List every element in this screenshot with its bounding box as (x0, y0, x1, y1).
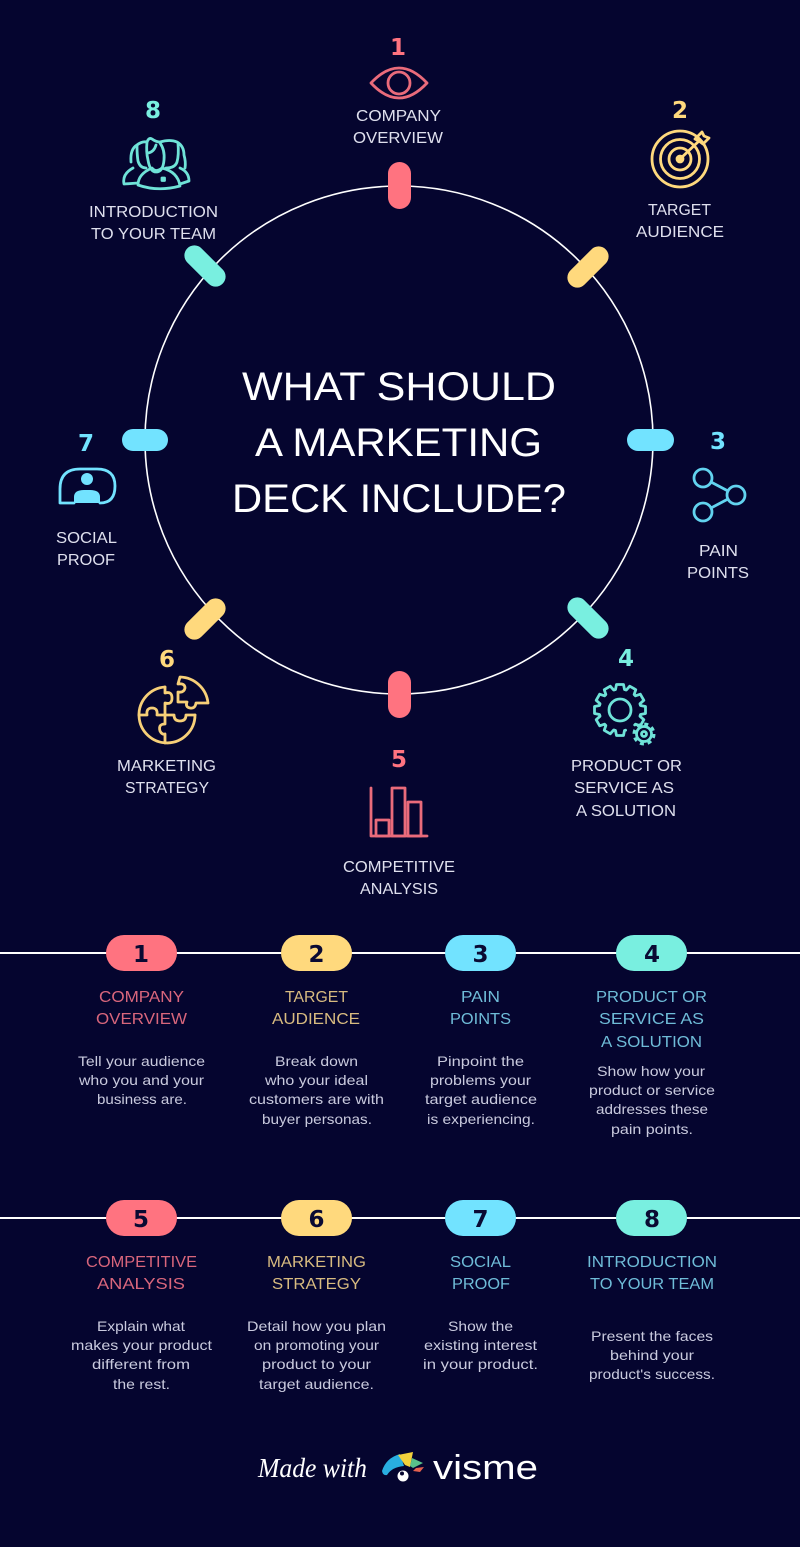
card 6: marketing strategy: MARKETING (267, 1254, 366, 1271)
card 8: introduction to your team (587, 1254, 717, 1382)
card 1: company overview: OVERVIEW (96, 1011, 188, 1028)
item 6: marketing strategy: MARKETING (117, 758, 216, 775)
item 1: company overview: OVERVIEW (353, 130, 444, 147)
card 5: competitive analysis: different from (92, 1356, 190, 1372)
card 7: social proof: Show the (448, 1318, 513, 1334)
title: A MARKETING (255, 421, 542, 465)
item 1: company overview: 1 (390, 35, 406, 61)
card 6: marketing strategy: STRATEGY (272, 1276, 361, 1293)
item 1: company overview: COMPANY (356, 108, 441, 125)
item 4: product or service: A SOLUTION (576, 803, 676, 820)
timeline row 1: 2 (308, 942, 325, 968)
item 3: pain points (687, 429, 749, 582)
card 5: competitive analysis: ANALYSIS (97, 1276, 185, 1293)
card 4: product or service: pain points. (611, 1121, 693, 1137)
item 3: pain points: 3 (710, 429, 726, 455)
footer: made with visme: Made with (257, 1453, 367, 1483)
card 3: pain points: problems your (430, 1072, 531, 1088)
card 2: target audience: customers are with (249, 1091, 384, 1107)
item 7: social proof (56, 431, 117, 569)
item 3: pain points: POINTS (687, 565, 749, 582)
card 1: company overview: Tell your audience (78, 1053, 205, 1069)
card 3: pain points: Pinpoint the (437, 1053, 524, 1069)
item 6: marketing strategy: 6 (159, 647, 175, 673)
card 2: target audience: who your ideal (264, 1072, 368, 1088)
card 4: product or service: Show how your (597, 1063, 705, 1079)
card 3: pain points: is experiencing. (427, 1111, 535, 1127)
card 4: product or service (589, 989, 715, 1137)
timeline row 2: 7 (472, 1207, 489, 1233)
card 7: social proof (423, 1254, 538, 1372)
card 1: company overview: who you and your (78, 1072, 204, 1088)
item 6: marketing strategy (117, 647, 216, 797)
card 2: target audience: TARGET (285, 989, 348, 1006)
card 4: product or service: A SOLUTION (601, 1034, 702, 1051)
timeline row 2: 5 (133, 1207, 149, 1233)
ring diagram (122, 162, 674, 718)
card 6: marketing strategy: product to your (262, 1356, 371, 1372)
item 8: introduction to your team: 8 (145, 98, 161, 124)
timeline row 1: 1 (133, 942, 149, 968)
card 8: introduction to your team: INTRODUCTION (587, 1254, 717, 1271)
card 5: competitive analysis: Explain what (97, 1318, 185, 1334)
item 2: target audience: AUDIENCE (636, 224, 724, 241)
title (232, 365, 566, 521)
footer: made with visme (257, 1449, 538, 1487)
card 4: product or service: PRODUCT OR (596, 989, 707, 1006)
card 6: marketing strategy: target audience. (259, 1376, 374, 1392)
item 2: target audience: 2 (672, 98, 688, 124)
card 6: marketing strategy (247, 1254, 386, 1392)
card 1: company overview (78, 989, 205, 1107)
card 4: product or service: addresses these (596, 1101, 708, 1117)
card 7: social proof: existing interest (424, 1337, 537, 1353)
card 8: introduction to your team: Present the faces (591, 1328, 713, 1344)
timeline row 1 (0, 935, 800, 971)
card 3: pain points (425, 989, 537, 1127)
card 4: product or service: product or service (589, 1082, 715, 1098)
item 8: introduction to your team (89, 98, 218, 243)
item 7: social proof: 7 (78, 431, 94, 457)
item 5: competitive analysis: COMPETITIVE (343, 859, 455, 876)
card 2: target audience: AUDIENCE (272, 1011, 360, 1028)
card 5: competitive analysis: makes your product (71, 1337, 212, 1353)
item 4: product or service: SERVICE AS (574, 780, 674, 797)
footer: made with visme: visme (433, 1449, 538, 1487)
timeline row 1: 3 (472, 942, 489, 968)
item 4: product or service: 4 (618, 646, 634, 672)
card 6: marketing strategy: Detail how you plan (247, 1318, 386, 1334)
card 8: introduction to your team: TO YOUR TEAM (590, 1276, 714, 1293)
item 5: competitive analysis (343, 747, 455, 898)
card 3: pain points: target audience (425, 1091, 537, 1107)
card 8: introduction to your team: product's success. (589, 1366, 715, 1382)
item 4: product or service (571, 646, 682, 820)
card 5: competitive analysis: the rest. (113, 1376, 170, 1392)
item 8: introduction to your team: INTRODUCTION (89, 204, 218, 221)
item 4: product or service: PRODUCT OR (571, 758, 682, 775)
item 5: competitive analysis: ANALYSIS (360, 881, 438, 898)
item 2: target audience: TARGET (648, 202, 711, 219)
card 2: target audience: buyer personas. (262, 1111, 372, 1127)
card 3: pain points: POINTS (450, 1011, 511, 1028)
card 1: company overview: business are. (97, 1091, 187, 1107)
item 3: pain points: PAIN (699, 543, 738, 560)
card 4: product or service: SERVICE AS (599, 1011, 704, 1028)
card 7: social proof: SOCIAL (450, 1254, 511, 1271)
item 8: introduction to your team: TO YOUR TEAM (91, 226, 216, 243)
title: DECK INCLUDE? (232, 477, 566, 521)
card 2: target audience (249, 989, 384, 1127)
timeline row 1: 4 (644, 942, 660, 968)
card 5: competitive analysis: COMPETITIVE (86, 1254, 197, 1271)
card 7: social proof: PROOF (452, 1276, 510, 1293)
timeline row 2: 6 (308, 1207, 325, 1233)
item 5: competitive analysis: 5 (391, 747, 407, 773)
timeline row 2: 8 (644, 1207, 660, 1233)
title: WHAT SHOULD (242, 365, 556, 409)
card 6: marketing strategy: on promoting your (254, 1337, 379, 1353)
card 7: social proof: in your product. (423, 1356, 538, 1372)
card 8: introduction to your team: behind your (610, 1347, 694, 1363)
item 7: social proof: PROOF (57, 552, 115, 569)
timeline row 2 (0, 1200, 800, 1236)
card 1: company overview: COMPANY (99, 989, 184, 1006)
item 1: company overview (353, 35, 444, 147)
item 2: target audience (636, 98, 724, 241)
card 5: competitive analysis (71, 1254, 212, 1392)
card 2: target audience: Break down (275, 1053, 358, 1069)
card 3: pain points: PAIN (461, 989, 500, 1006)
item 7: social proof: SOCIAL (56, 530, 117, 547)
item 6: marketing strategy: STRATEGY (125, 780, 209, 797)
